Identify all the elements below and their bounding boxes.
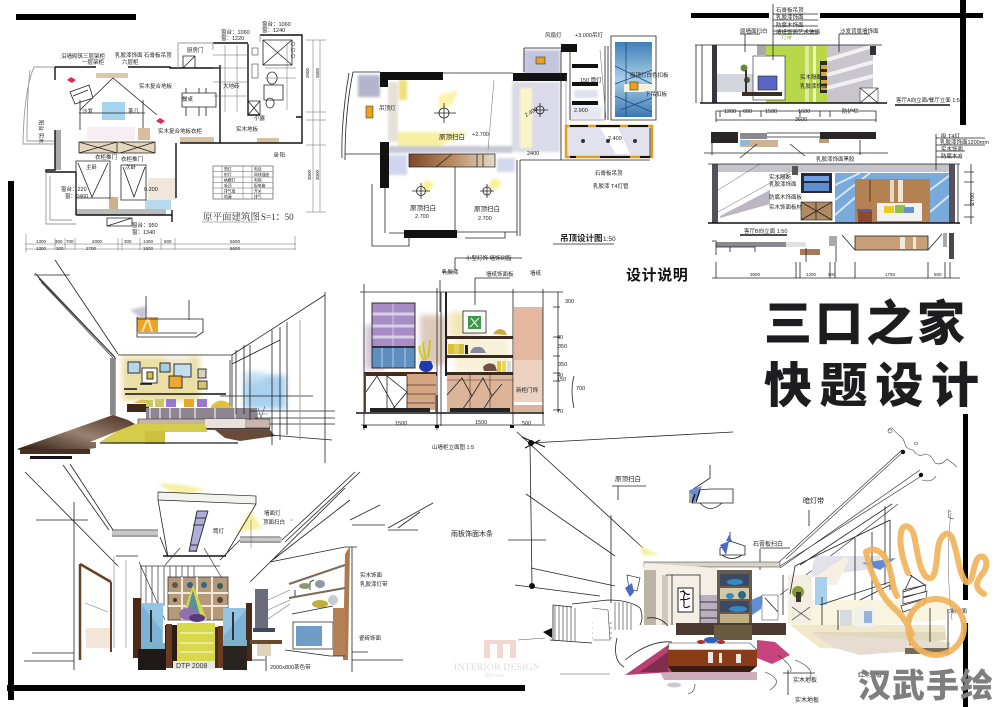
ceiling plan labels: 原顶扫白 [410,203,436,212]
floor plan dimension lines: 1300 [36,239,47,244]
floor plan labels: 窗：2460 [65,192,88,200]
ceiling plan watercolour washes [358,50,602,192]
ceiling plan labels: 2.400 [608,136,622,142]
ceiling plan labels: 2.700 [478,216,492,222]
title: 三口之家 快题设计: 快题设计 [764,360,979,413]
panel: elevation drawings [695,4,989,278]
elevation B [708,132,989,224]
floor plan labels: 厨房门 [187,46,204,54]
bedroom picture frames [124,362,226,394]
living room rug [625,640,811,694]
ceiling plan blue room [611,36,656,120]
floor plan labels: 衣柜推门 [121,155,143,163]
elevation A: 1500 [765,109,777,115]
cabinet outlines and dimensions: 墙纸 [530,269,542,277]
dining ceiling: 顶面扫白 [263,518,285,526]
living room ceiling lines [508,428,957,620]
floor plan legend: 电视 [254,178,262,182]
ceiling plan labels [379,31,669,222]
dining bookshelf [168,577,228,620]
dining table: DTP 2008 [176,663,207,670]
living room bookshelf [717,570,763,630]
floor plan dimension lines: 1600 [143,246,154,251]
living room labels: 红木地板 [858,671,882,679]
dining table [138,623,247,670]
living room low cabinets [676,575,796,640]
floor plan dimension lines: 300 [55,239,63,244]
floor plan dimension lines: 300 [124,239,132,244]
elevation B: 实木饰面板材 [769,203,803,211]
cabinet outlines and dimensions: 350 [558,344,567,350]
ceiling plan labels: 石膏板吊顶 [595,169,623,177]
floor plan dimension lines [25,40,326,252]
living room back wall [625,545,780,625]
ceiling plan labels: +3.000吊灯 [575,31,603,39]
ceiling plan labels: 吸顶灯白色扣板 [630,71,669,79]
cabinet outlines and dimensions: 1500 [395,421,407,427]
elevation B title: 客厅B向立面 1:50 [744,227,787,235]
dining labels [270,571,388,671]
living room right wall cabinets [788,504,950,655]
plan strip B: 1200 [806,272,817,277]
floor plan labels: 窗：1340 [132,228,155,236]
floor plan labels: 实木复合地板 [139,82,173,90]
brand: 汉武手绘: 汉武手绘 [858,667,993,704]
plan strip B [712,233,960,278]
dining blue side panels [133,598,252,661]
ceiling plan labels: 风扇灯 [545,31,562,39]
floor plan dimension lines: 5600 [230,246,241,251]
cabinet outlines and dimensions: 乳胶漆 [442,268,459,276]
balcony outline [23,67,55,144]
floor plan labels [37,20,291,236]
living room labels: 实木地板 [795,696,819,704]
elevation B title [740,227,787,235]
floor plan labels: 茶几 [128,107,140,115]
floor plan walls [46,35,302,222]
dining ceiling: 筒灯 [213,527,225,535]
living room labels: 暗灯带 [803,496,824,505]
ceiling plan labels: 原顶扫白 [474,204,500,213]
floor plan labels: 衣柜推门 [95,153,117,161]
plan strip A [704,132,888,158]
floor plan labels: 卧阳 [274,151,285,159]
ceiling plan labels: 150 筒灯 [580,76,602,84]
floor plan labels: 0.200 [144,187,158,193]
ceiling plan brown cabinet [409,154,495,167]
floor plan legend: 地漏 [224,194,232,199]
elevation B: 实木隔断 [769,173,792,181]
floor plan labels: 次卧 [125,163,137,171]
elevation A: 原墙面扫白 [740,27,768,35]
elevation A: 3600 [795,117,807,123]
floor plan dimension lines: 3000 [307,169,312,180]
cabinet potted plant [419,340,433,372]
floor plan dimension lines: 3000 [315,169,320,180]
panel: dining room perspective [24,464,433,672]
floor plan labels: 大地砖 [223,82,240,90]
watermark: interior design logo [454,640,540,679]
floor plan legend: 射灯 [224,172,232,177]
elevation A: 灯带 [781,33,793,41]
floor plan legend: 格栅灯 [224,178,236,182]
elevation A title: 客厅A向立面/餐厅立面 1:50 [896,96,963,104]
elevation A: 1600 [798,109,810,115]
floor plan labels: 窗台：1060 [221,28,250,36]
elevation A: 实木隔断 [800,73,823,81]
plan strip B: 3600 [750,272,761,277]
watermark: interior design logo: @int-des [484,673,505,679]
floor plan labels: 实木地板 [236,125,259,133]
floor plan dimension lines: 3600 [315,67,320,78]
cabinet outlines and dimensions: 150 [557,377,566,383]
cabinet wall wash [365,312,510,373]
ceiling plan labels: 下吊扣板 [645,90,668,98]
dining left wall lines [24,472,138,670]
ceiling plan labels: 2.900 [574,108,588,114]
title: 三口之家 快题设计 [764,297,979,413]
floor plan legend: 网线插座 [254,172,269,177]
floor plan dimension lines: 600 [164,239,172,244]
cabinet outlines and dimensions: 70 [557,409,563,415]
bedroom yellow floor rug [100,424,238,444]
panel: cabinet elevation [356,254,585,451]
plan strip B: 600 [934,272,942,277]
cabinet outlines and dimensions: 新柜门饰 [516,386,539,394]
plan strip B: 500 [828,272,836,277]
elevation B: 防腐木饰面板 [769,193,803,201]
dining right wall shelves [250,488,433,672]
floor plan dimension lines: 700 [66,239,74,244]
floor plan dimension lines: 2000 [92,239,103,244]
elevation A: 乳胶漆饰面 [776,13,804,21]
watermark: interior design logo: INTERIOR DESIGN [454,663,540,673]
floor plan labels: 主卧 [86,163,98,171]
framed picture [463,311,486,333]
left low cabinet [364,372,438,412]
ceiling plan title: 1:50 [603,236,616,243]
floor plan labels: 窗：1220 [221,34,244,42]
floor plan labels: 餐桌 [182,95,194,103]
bedroom hanging light box [130,296,203,337]
bedroom ceiling beam [34,260,232,416]
cabinet window with curtain [372,303,415,368]
floor plan dimension lines: 300 [56,246,64,251]
plan strip B: 1750 [885,272,896,277]
dining flower arrangement [179,585,207,622]
elevation B: 防腐木方 [941,152,964,160]
ceiling plan labels: +2.700 [472,132,489,138]
floor plan labels: 阳台 实木 [37,120,45,144]
panel: bedroom perspective [17,260,335,463]
living room labels: 木制柜面 [945,607,968,615]
ceiling plan labels: 2400 [527,151,539,157]
ceiling plan labels: 乳胶漆 T4灯管 [593,182,629,190]
elevation B: 乳胶漆饰面1200mm [940,138,989,146]
ceiling plan black walls [380,44,598,238]
elevation A: 沙发背景墙饰面 [840,27,879,35]
bedroom right wall lines [220,292,335,463]
ceiling plan labels: 吊顶灯 [379,104,396,112]
floor plan dimension lines: 1300 [36,246,47,251]
floor plan legend: 筒灯 [224,166,232,172]
elevation A: 石膏板吊顶 [776,6,804,14]
floor plan legend: 吸顶 [224,183,232,188]
right shelves and cabinet [445,292,513,412]
floor plan labels: 六层柜 [122,58,139,66]
dining labels: 2000x800茶色带 [270,663,311,671]
panel: ceiling plan [342,31,669,246]
ceiling plan labels: 2.400 [524,107,539,119]
floor plan colour fills [55,73,279,215]
cabinet outlines and dimensions: 300 [565,299,574,305]
bedroom wall wash [122,356,286,409]
living room labels: 雨板饰面木条 [451,529,493,538]
elevation A: 1200 [724,109,736,115]
floor plan furniture [67,40,296,226]
floor plan title [202,211,294,223]
floor plan labels: 窗台：950 [132,221,158,229]
cabinet outlines and dimensions: 350 [558,362,567,368]
floor plan labels: 沙发 [82,107,94,115]
elevation B: 乳胶漆饰面黑胶 [816,155,855,163]
cabinet outlines and dimensions [356,254,585,430]
ceiling plan bathroom [566,126,652,157]
living room labels: 石膏板扫白 [753,540,783,548]
panel: living room perspective [451,428,968,704]
cabinet outlines and dimensions: 40 [557,335,563,341]
elevation A: 600 [743,109,752,115]
dining labels: 瓷砖饰面 [359,634,382,642]
floor plan dimension lines: 5600 [230,239,241,244]
floor plan labels: 窗：1240 [262,26,285,34]
elevation A [695,4,887,123]
floor plan title: S=1：50 [261,212,294,222]
floor plan labels: 乳胶漆饰面 石膏板吊顶 [115,51,172,59]
floor plan labels: 窗台：1060 [262,20,291,28]
dining labels: 乳胶漆灯带 [360,580,388,588]
cabinet outlines and dimensions: 500 [522,421,531,427]
elevation A: 防护栏 [842,107,859,115]
cabinet outlines and dimensions: 墙纸饰面板 [486,270,514,278]
coffee table [668,637,757,672]
ceiling plan title [553,233,616,244]
floor plan legend: 电话 [254,166,262,172]
dining partition lines [139,548,223,620]
elevation A: 乳胶漆饰面 [800,82,828,90]
elevation A: 墙纸饰面艺术玻璃 [776,28,821,36]
label: design description: 设计说明 [626,267,688,284]
floor plan labels: 窗台：220 [61,185,87,193]
floor plan labels: 沿墙砌筑三层架柜 [61,52,106,60]
bedroom dark floor [17,415,275,459]
floor plan labels: 一层架柜 [82,58,105,66]
living room labels: 原顶扫白 [615,474,641,483]
bedroom bed with cushions [127,399,270,429]
elevation B: 吸 T4灯 [941,132,960,140]
ceiling plan lamps and outlines [342,46,650,246]
floor plan legend: 排气 [254,194,262,199]
title: 三口之家 快题设计: 三口之家 [764,297,965,351]
logo: orange hand squiggle [866,526,986,655]
cabinet outlines and dimensions: 1500 [475,420,487,426]
floor plan labels: 小露 [254,114,266,122]
elevation B: 2700 [970,193,976,205]
dining door [80,564,111,660]
pendant lamps [690,465,745,558]
ceiling plan labels: 原顶扫白 [439,132,465,141]
living room labels: 实木地板 [793,676,817,684]
cabinet outlines and dimensions: 700 [576,386,585,392]
floor plan legend: 配电箱 [254,183,266,188]
floor plan labels: 实木复合地板衣柜 [158,127,203,135]
floor plan legend: 排气扇 [224,188,236,194]
elevation B: 实木饰面 [941,145,964,153]
cabinet outlines and dimensions: 小型灯饰 墙饰树脂 [466,254,512,262]
tall side panel [513,289,543,424]
elevation B: 乳胶漆饰面 [769,180,797,188]
cabinet elevation title: 山墙柜立面图 1:5 [432,443,474,451]
dining ceiling: 墙面灯 [264,509,281,517]
floor plan dimension lines: 1400 [143,239,154,244]
living room labels [451,474,968,704]
floor plan title: 原平面建筑图 [203,211,260,223]
elevation A: 防腐木饰面 [776,21,804,29]
floor plan legend: 开关 [254,188,262,194]
floor plan legend [213,166,273,199]
living room sofa and cushions [518,600,675,675]
floor plan dimension lines: 3600 [305,67,310,78]
dining ceiling [63,464,360,560]
ceiling plan labels: 2.700 [415,214,429,220]
dining labels: 实木饰面 [360,571,383,579]
cabinet outlines and dimensions: 40 [557,373,563,379]
panel: original floor plan [23,20,326,252]
ceiling plan title: 吊顶设计图 [560,233,603,243]
floor plan dimension lines: 2700 [86,246,97,251]
elevation A title [895,96,963,105]
